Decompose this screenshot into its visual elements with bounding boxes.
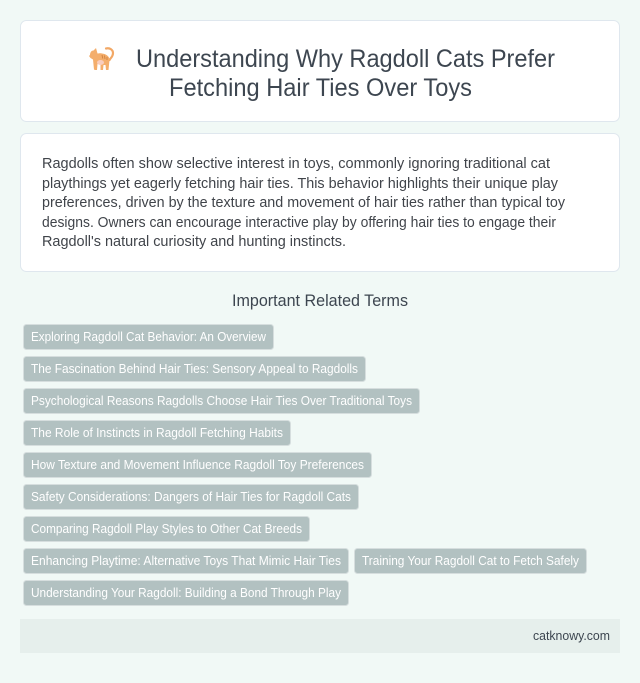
summary paragraph: preferences, driven by the texture and movement of hair ties rather than typical toy	[42, 195, 566, 211]
panel: summary text	[20, 134, 620, 272]
tag 10: Understanding Your Ragdoll: Building a Bond Through Play	[31, 586, 342, 600]
tag 9: Training Your Ragdoll Cat to Fetch Safely	[362, 554, 580, 568]
tag 5	[24, 452, 372, 478]
title text: Fetching Hair Ties Over Toys	[169, 74, 472, 102]
summary paragraph: playthings yet eagerly fetching hair ties. This behavior highlights their unique play	[42, 176, 559, 192]
icon: cat	[89, 48, 113, 70]
tag 6: Safety Considerations: Dangers of Hair Ties for Ragdoll Cats	[31, 490, 351, 504]
summary paragraph: Ragdoll's natural curiosity and hunting instincts.	[42, 234, 346, 250]
tag 7	[24, 516, 310, 542]
tag 3	[24, 388, 420, 414]
tag 9	[354, 548, 586, 574]
footer: catknowy.com	[533, 628, 610, 643]
tag 2: The Fascination Behind Hair Ties: Sensory Appeal to Ragdolls	[31, 362, 358, 376]
tag 8: Enhancing Playtime: Alternative Toys That Mimic Hair Ties	[31, 554, 341, 568]
tag 6	[24, 484, 358, 510]
tag 10	[24, 580, 348, 606]
footer	[20, 619, 620, 653]
panel: title card	[20, 20, 620, 122]
tag 4	[24, 420, 290, 446]
tag 1	[24, 324, 274, 350]
tag 3: Psychological Reasons Ragdolls Choose Hair Ties Over Traditional Toys	[31, 394, 412, 408]
title text: Understanding Why Ragdoll Cats Prefer	[136, 45, 555, 73]
tag 5: How Texture and Movement Influence Ragdoll Toy Preferences	[31, 458, 364, 472]
summary paragraph	[42, 156, 566, 250]
summary paragraph: Ragdolls often show selective interest in toys, commonly ignoring traditional cat	[42, 156, 550, 172]
tag 4: The Role of Instincts in Ragdoll Fetching Habits	[31, 426, 283, 440]
tag 7: Comparing Ragdoll Play Styles to Other Cat Breeds	[31, 522, 302, 536]
summary paragraph: designs. Owners can encourage interactive play by offering hair ties to engage their	[42, 215, 556, 231]
tag list	[24, 324, 586, 606]
heading: important related terms: Important Related Terms	[232, 292, 408, 310]
title text	[136, 45, 555, 102]
tag 2	[24, 356, 366, 382]
tag 8	[24, 548, 348, 574]
tag 1: Exploring Ragdoll Cat Behavior: An Overview	[31, 330, 267, 344]
